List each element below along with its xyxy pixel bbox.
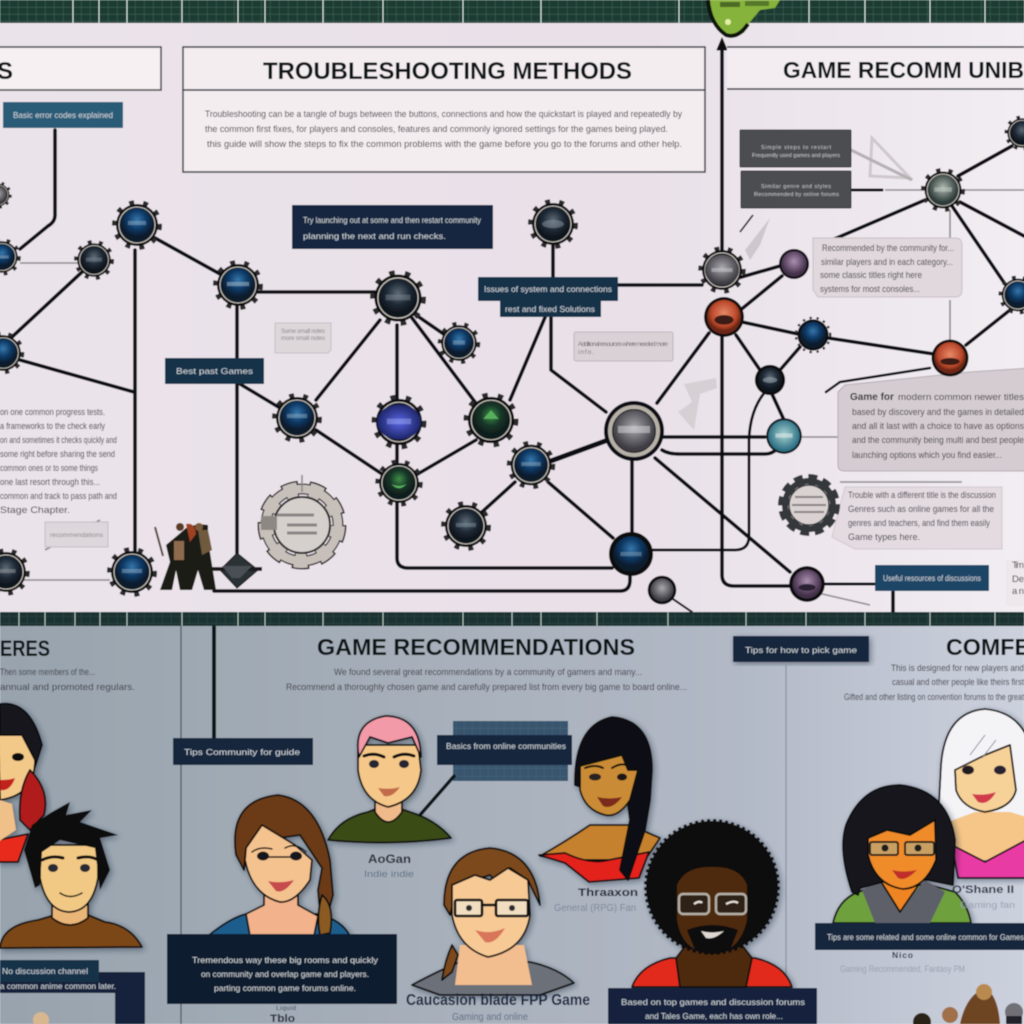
label: tag left bottom panel: Tips Community for guide [184, 747, 300, 757]
panel: troubleshooting methods [183, 47, 705, 172]
connector network [12, 38, 1024, 612]
text block: dark-haired woman name [554, 887, 638, 914]
text block: right edge note: an [1012, 586, 1024, 597]
text block: recommendations description: We found several great recommendations by a community of gamers and many... [334, 667, 642, 678]
callout: gray note top right [813, 238, 962, 297]
node: blue [216, 262, 260, 308]
dividers [180, 626, 182, 1024]
callout: gray panel right: Game for [850, 392, 894, 403]
icon: small characters bottom right [913, 984, 1023, 1024]
node: purple bottom [789, 566, 825, 602]
label: central double tag [478, 277, 618, 317]
text block: bob-haired woman name: Nico [892, 950, 913, 960]
character: spiky-haired man [0, 802, 142, 948]
bottom heading: game recommendations: GAME RECOMMENDATIONS [317, 634, 635, 660]
node: dark blue lower [444, 504, 488, 548]
text block: pink-haired man name: AoGan [368, 852, 411, 866]
text block: left description: annual and promoted regulars. [0, 682, 135, 693]
callout: gray note top right: similar players and in each category... [821, 257, 953, 268]
callout: small gray note: Some small notes [281, 329, 325, 335]
node: small blue right [796, 318, 830, 352]
label: framed dark box bottom left: No discussion channel [2, 966, 88, 976]
text block: troubleshooting description: the common first fixes, for players and consoles, features and commonly ignored settings for the games being played. [205, 124, 668, 135]
node: orange right [932, 340, 968, 376]
label: dark box under brown-haired woman: on community and overlap game and players. [201, 969, 369, 979]
character: woman with dark hair and red dress [539, 717, 660, 882]
text block: left column: a frameworks to the check early [0, 421, 105, 432]
callout: gray panel right: modern common newer titles [898, 392, 1024, 403]
callout: small gray note [275, 323, 331, 353]
text block: troubleshooting description: this guide will show the steps to fix the common problems with the game before you go to the forums and other help. [207, 139, 682, 150]
label: blue tag top left [3, 102, 123, 128]
text block: left description [0, 667, 135, 693]
bottom grid strip [0, 612, 1024, 626]
label: framed dark box bottom left: a common anime common later. [0, 981, 116, 991]
icon: diamond node [212, 553, 262, 588]
character: pink-haired man [328, 716, 451, 843]
text block: white-haired woman name: O'Shane II [952, 884, 1014, 896]
text block: left column: one last resort through this... [0, 477, 100, 488]
node: orange upper [704, 297, 744, 337]
label: dark note: planning the next and run checks. [303, 231, 446, 241]
panel: gray tag pair: Similar genre and styles [761, 184, 831, 190]
character: man with glasses [412, 848, 574, 995]
panel: game recommendation header [727, 47, 1024, 90]
node: small dark blue [76, 242, 112, 278]
text block: right edge note: De [1012, 574, 1024, 585]
label: framed dark box bottom left [0, 960, 145, 1024]
node: small gray bottom [648, 576, 676, 604]
text block: white-haired woman name [952, 884, 1015, 910]
node: green lower [378, 462, 420, 504]
character: woman with brown hair and glasses [208, 795, 350, 936]
panel: gray tag pair [740, 130, 851, 208]
node: left blue lower [0, 334, 22, 372]
node: bottom far left [0, 551, 27, 593]
label: blue tag top left: Basic error codes explained [13, 110, 113, 120]
label: dark note: Try launching out at some and then restart community [303, 215, 482, 225]
label: dark note [292, 205, 493, 249]
node: right blue [1000, 277, 1024, 313]
text block: right edge note: Tim [1012, 560, 1024, 571]
callout: gray panel right [838, 368, 1024, 471]
node row: network nodes [0, 117, 1024, 604]
label: tag left centre: Best past Games [176, 366, 253, 376]
panel: gray tag pair: Frequently used games and players [752, 153, 840, 159]
icon: large gear [261, 475, 338, 561]
icon: small adventurer characters [155, 523, 216, 590]
label: tag top right bottom panel: Tips for how to pick game [745, 645, 857, 655]
text block: left column: some right before sharing the send [0, 449, 115, 460]
callout: gray note lower left [45, 522, 108, 547]
character: afro man [632, 821, 792, 987]
label: dark box under brown-haired woman [167, 934, 397, 1004]
label: tag left bottom panel [173, 738, 313, 765]
text block: blade FPP caption [406, 992, 590, 1023]
label: central double tag: rest and fixed Solutions [505, 304, 595, 314]
label: grid-backed tag: Basics from online communities [446, 741, 566, 751]
label: dark box under brown-haired woman: Tremendous way these big rooms and quickly [192, 955, 379, 965]
node: central dark [373, 273, 423, 323]
callout: gray note centre right: Additional resources where needed more [578, 341, 668, 348]
text block: white-haired woman name: Gaming fan [960, 900, 1015, 910]
panel: gray tag pair: Simple steps to restart [761, 145, 831, 151]
title: troubleshooting methods: TROUBLESHOOTING METHODS [263, 58, 632, 85]
node: gray upper hub [701, 249, 743, 291]
text block: left column: common and track to pass path and [0, 491, 117, 502]
text block: left column [0, 407, 117, 516]
text block: name below dark box: Liquid [276, 1005, 296, 1012]
text block: left column: on and sometimes it checks quickly and [0, 435, 117, 446]
panel: game recommendation header: GAME RECOMM UNIB [783, 57, 1024, 83]
node: far left gray [0, 183, 10, 207]
icon: green monster badge [708, 0, 780, 36]
bottom panel background [0, 626, 1024, 1024]
text block: name below dark box [270, 1005, 296, 1024]
connector: tag to pink character [420, 775, 455, 815]
label: tag left centre [165, 358, 264, 384]
text block: dark-haired woman name: Thraaxon [578, 887, 638, 899]
text block: dark-haired woman name: General (RPG) Fan [554, 903, 636, 914]
callout: gray note top right: some classic titles right here [820, 270, 922, 281]
node: purple [779, 249, 809, 279]
node: top right corner [1006, 117, 1024, 149]
callout: gear note: Genres such as online games for all the [848, 504, 994, 515]
label: blue tag bottom right: Useful resources of discussions [883, 573, 981, 583]
node: bottom left blue [110, 550, 154, 594]
label: blue tag bottom right [875, 565, 989, 591]
callout: gray note centre right: info. [578, 349, 594, 356]
node: top centre dark [530, 202, 576, 246]
text block: pink-haired man name: Indie indie [364, 869, 414, 880]
node: large gray hub [604, 401, 664, 461]
callout: gray note top right: systems for most consoles... [820, 284, 920, 295]
node: indigo [374, 397, 424, 447]
node: left blue [0, 240, 19, 274]
label: tag top right bottom panel [733, 636, 869, 662]
character: woman left edge [0, 704, 45, 862]
text block: right description [844, 663, 1024, 703]
text block: blade FPP caption: Gaming and online [452, 1012, 528, 1023]
callout: gear note: genres and teachers, and find them easily [848, 518, 990, 529]
label: dark box under brown-haired woman: parting common game forums online. [214, 983, 356, 993]
node: teal [766, 418, 802, 454]
label: dark box under afro man: Based on top games and discussion forums [621, 997, 805, 1007]
character: woman with black bob and glasses [833, 785, 971, 923]
top panel background [0, 22, 1024, 612]
node: blue dark right [509, 443, 553, 487]
top grid strip [0, 0, 1024, 23]
text block: recommendations description [286, 667, 687, 693]
label: dark box under afro man [608, 988, 817, 1024]
callout: gray note centre right [574, 332, 673, 361]
text block: pink-haired man name [364, 852, 414, 880]
text block: left column: Stage Chapter. [0, 505, 70, 516]
label: dark box under bob-haired woman [815, 923, 1024, 950]
callout: gray panel right: launching options which you find easier... [852, 450, 1002, 461]
icon: dark gear [784, 480, 834, 530]
label: dark box under afro man: and Tales Game, each has own role... [645, 1011, 783, 1021]
node: green dark [466, 395, 516, 445]
node: top blue [114, 202, 160, 248]
text block: left column: common ones or to some things [0, 463, 98, 474]
callout: gray note top right: Recommended by the community for... [822, 243, 954, 254]
label: central double tag: Issues of system and connections [484, 284, 612, 294]
label: grid-backed tag [437, 721, 572, 781]
text block: recommendations description: Recommend a thoroughly chosen game and carefully prepared list from every big game to board online... [286, 682, 687, 693]
text block: troubleshooting description: Troubleshooting can be a tangle of bugs between the buttons, connections and how the quickstart is played and repeatedly by [205, 109, 682, 120]
character: white-haired woman [938, 709, 1024, 878]
node: lower dark blue [609, 532, 653, 576]
text block: left description: Then some members of the... [0, 667, 95, 678]
text block: bob-haired woman name [840, 950, 965, 974]
text block: right edge note [1006, 560, 1024, 606]
text block: left column: on one common progress tests. [0, 407, 105, 418]
text block: bob-haired woman name: Gaming Recommended, Fantasy PM [840, 964, 965, 974]
text block: blade FPP caption: Caucasion blade FPP Game [406, 992, 590, 1009]
node: small blue [440, 324, 478, 362]
callout: small gray note: more small notes [281, 336, 325, 342]
callout: gray note lower left: recommendations [50, 532, 104, 539]
node: mid blue [274, 396, 320, 440]
header: partial title [0, 47, 161, 90]
bottom heading: left partial: ERES [0, 636, 50, 661]
node: small dark right [755, 365, 785, 395]
callout: gear note: Game types here. [848, 532, 920, 543]
panel: gray tag pair: Recommended by online forums [754, 192, 839, 198]
node: gray green [923, 170, 963, 210]
callout: gear note [832, 487, 1002, 549]
text block: troubleshooting description [205, 109, 682, 150]
